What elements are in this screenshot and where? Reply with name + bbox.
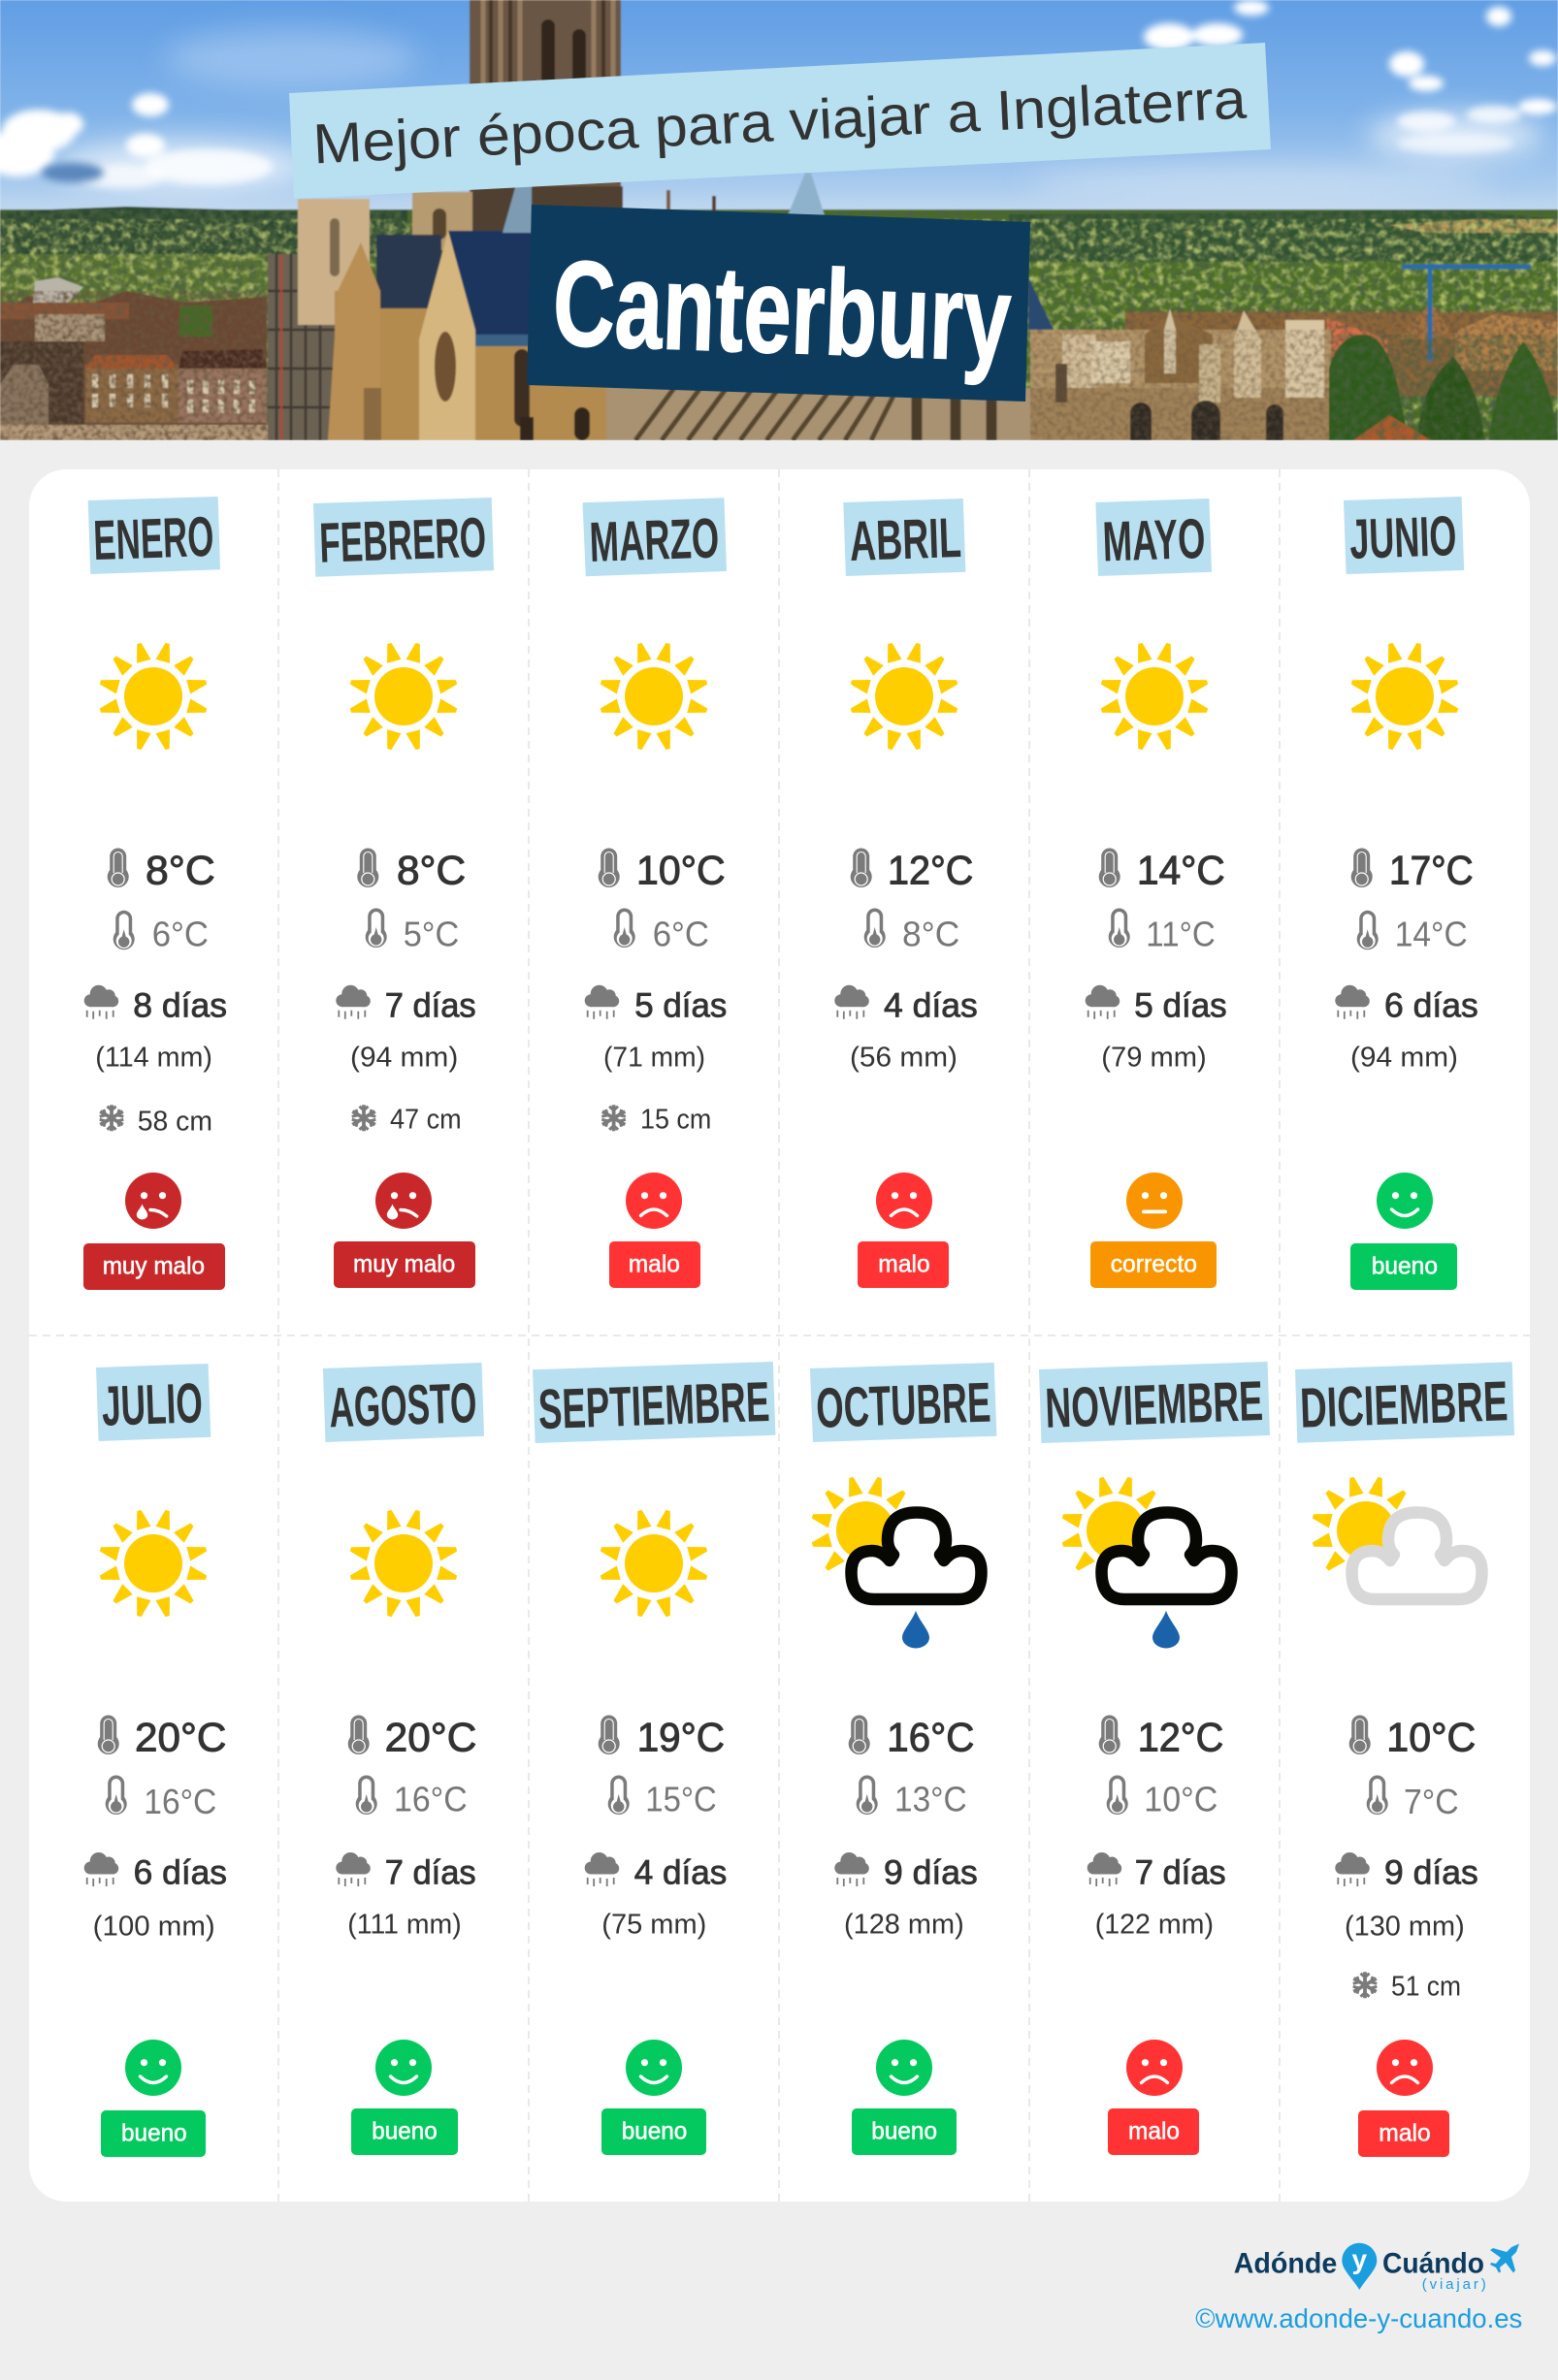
rating badge: bueno xyxy=(871,2117,937,2144)
rating face xyxy=(125,2040,181,2096)
month label xyxy=(88,497,220,574)
month label: JULIO xyxy=(101,1371,204,1438)
rating badge xyxy=(351,2108,458,2155)
month label xyxy=(323,1363,484,1442)
rating badge xyxy=(1108,2108,1199,2155)
title text: Mejor época para viajar a Inglaterra xyxy=(311,68,1249,177)
panel: marzo xyxy=(582,498,727,1288)
snowfall xyxy=(100,1105,212,1138)
right cathedral xyxy=(1029,328,1332,389)
low temperature xyxy=(356,1775,468,1818)
month label: SEPTIEMBRE xyxy=(537,1370,770,1441)
month label xyxy=(843,499,965,576)
rainy days: 9 días xyxy=(884,1853,978,1891)
month label: NOVIEMBRE xyxy=(1044,1369,1264,1440)
rainy days: 5 días xyxy=(1134,986,1227,1024)
low temperature: 6°C xyxy=(653,915,709,954)
month label: OCTUBRE xyxy=(815,1371,991,1440)
panel: julio xyxy=(84,1364,227,2157)
rating badge xyxy=(609,1241,700,1288)
rainy days: 7 días xyxy=(385,1853,476,1891)
right town roofs xyxy=(1125,312,1558,396)
high temperature: 20°C xyxy=(385,1715,476,1760)
icon: sun behind grey cloud xyxy=(1311,1475,1482,1599)
rainy days: 4 días xyxy=(884,986,978,1024)
low temperature: 10°C xyxy=(1144,1779,1217,1818)
low temperature: 11°C xyxy=(1146,915,1216,954)
rating badge xyxy=(83,1243,225,1290)
city name banner xyxy=(527,205,1030,402)
panel: enero xyxy=(83,497,227,1290)
high temperature: 12°C xyxy=(1138,1715,1223,1760)
rating face xyxy=(626,1173,682,1229)
rainfall: (79 mm) xyxy=(1101,1042,1207,1073)
rating face xyxy=(1377,1173,1433,1229)
month label xyxy=(533,1362,775,1443)
low temperature xyxy=(857,1775,967,1818)
left town xyxy=(0,291,267,440)
panel: diciembre xyxy=(1295,1362,1514,2157)
rating badge: malo xyxy=(1379,2119,1431,2146)
month label: ABRIL xyxy=(849,506,962,573)
rainfall: (75 mm) xyxy=(601,1909,706,1940)
high temperature xyxy=(849,1715,974,1760)
snowfall: 47 cm xyxy=(390,1104,462,1135)
high temperature: 20°C xyxy=(135,1715,226,1760)
right trees xyxy=(1329,335,1409,440)
rainy days: 7 días xyxy=(385,986,476,1024)
rainy days xyxy=(834,985,978,1024)
month label: MARZO xyxy=(589,506,720,574)
panel: febrero xyxy=(313,498,494,1288)
rainy days xyxy=(585,1852,727,1891)
rainy days: 4 días xyxy=(634,1853,727,1891)
high temperature xyxy=(1099,848,1225,893)
rainfall: (71 mm) xyxy=(603,1042,705,1073)
icon: sun behind cloud with rain drop xyxy=(1060,1475,1232,1649)
icon: sun xyxy=(599,641,709,752)
high temperature: 14°C xyxy=(1137,848,1225,893)
rating face xyxy=(1377,2040,1433,2096)
snowfall xyxy=(1353,1972,1461,2003)
high temperature: 8°C xyxy=(146,848,215,893)
icon: sun xyxy=(98,1508,209,1619)
high temperature: 10°C xyxy=(1386,1715,1476,1760)
rainfall: (94 mm) xyxy=(350,1042,458,1073)
rainy days xyxy=(1335,985,1478,1024)
month label xyxy=(1344,497,1464,574)
rainy days xyxy=(336,1852,476,1891)
high temperature xyxy=(599,848,726,893)
low temperature: 6°C xyxy=(152,915,209,954)
snowfall: 58 cm xyxy=(138,1107,212,1138)
low temperature xyxy=(1107,1775,1217,1818)
month label xyxy=(313,498,494,577)
high temperature xyxy=(1349,1715,1476,1760)
icon: plane xyxy=(1490,2244,1519,2273)
high temperature xyxy=(1351,848,1474,893)
month label xyxy=(96,1364,211,1441)
rating badge: muy malo xyxy=(353,1250,455,1277)
high temperature: 12°C xyxy=(888,848,973,893)
cathedral central tower xyxy=(469,0,622,194)
rating badge: bueno xyxy=(622,2117,687,2144)
rainy days xyxy=(336,985,476,1024)
snowfall: 51 cm xyxy=(1391,1972,1461,2003)
rainfall: (114 mm) xyxy=(95,1042,212,1073)
rating face xyxy=(1126,1173,1183,1229)
rating badge: correcto xyxy=(1111,1250,1197,1277)
low temperature xyxy=(114,911,209,954)
city name: Canterbury xyxy=(551,236,1013,387)
rating face xyxy=(876,2040,932,2096)
rainfall: (130 mm) xyxy=(1345,1911,1465,1942)
rainfall: (100 mm) xyxy=(93,1911,215,1942)
rainy days: 6 días xyxy=(1384,986,1478,1024)
high temperature: 19°C xyxy=(637,1715,725,1760)
rating face xyxy=(375,1173,432,1229)
low temperature xyxy=(608,1775,717,1818)
snowfall: 15 cm xyxy=(640,1104,711,1135)
rainfall: (94 mm) xyxy=(1350,1042,1458,1073)
rainy days xyxy=(1087,1852,1226,1891)
rating badge: bueno xyxy=(372,2117,438,2144)
month label xyxy=(1039,1362,1270,1443)
icon: location pin with y: y xyxy=(1352,2244,1368,2274)
low temperature: 13°C xyxy=(894,1779,967,1818)
high temperature xyxy=(357,848,466,893)
rainy days: 5 días xyxy=(634,986,727,1024)
low temperature: 5°C xyxy=(404,915,459,954)
low temperature xyxy=(1367,1775,1459,1821)
low temperature xyxy=(864,908,959,954)
low temperature xyxy=(1109,908,1216,954)
rainfall: (122 mm) xyxy=(1095,1909,1214,1940)
rainy days xyxy=(84,985,227,1024)
icon: location pin with y xyxy=(1342,2243,1377,2290)
panel: junio xyxy=(1335,497,1478,1290)
towers xyxy=(268,254,338,440)
website credit: ©www.adonde-y-cuando.es xyxy=(1195,2303,1522,2333)
rainy days: 7 días xyxy=(1135,1853,1226,1891)
month label: AGOSTO xyxy=(328,1371,477,1439)
icon: sun xyxy=(1349,641,1460,752)
rating badge: malo xyxy=(629,1250,680,1277)
low temperature xyxy=(106,1775,216,1821)
month label xyxy=(582,498,727,576)
month label: MAYO xyxy=(1102,507,1206,574)
panel: abril xyxy=(834,499,978,1288)
rainy days: 6 días xyxy=(134,1853,227,1891)
icon: sun xyxy=(1099,641,1210,752)
header photo: Canterbury skyline xyxy=(0,0,1558,440)
icon: sun xyxy=(599,1508,709,1619)
rainy days: 9 días xyxy=(1384,1853,1478,1891)
rating badge xyxy=(1090,1241,1217,1288)
rating face xyxy=(125,1173,181,1229)
snowfall xyxy=(352,1104,462,1135)
rating badge: bueno xyxy=(121,2119,187,2146)
low temperature: 15°C xyxy=(645,1779,717,1818)
snowfall xyxy=(601,1104,711,1135)
rating badge: malo xyxy=(878,1250,930,1277)
high temperature xyxy=(1099,1715,1223,1760)
crane xyxy=(1402,264,1531,361)
rating badge xyxy=(858,1241,949,1288)
month label xyxy=(810,1363,996,1442)
title banner xyxy=(289,43,1271,199)
nave roof xyxy=(606,388,1033,440)
rating face xyxy=(626,2040,682,2096)
low temperature: 14°C xyxy=(1395,915,1468,954)
panel: septiembre xyxy=(533,1362,775,2155)
rating badge: malo xyxy=(1128,2117,1180,2144)
rainy days xyxy=(84,1852,227,1891)
rainfall: (56 mm) xyxy=(850,1042,958,1073)
footer logo xyxy=(1234,2243,1519,2293)
high temperature: 16°C xyxy=(887,1715,974,1760)
icon: sun behind cloud with rain drop xyxy=(810,1475,982,1649)
panel: mayo xyxy=(1086,499,1227,1288)
rainfall: (111 mm) xyxy=(347,1909,462,1940)
high temperature: 8°C xyxy=(397,848,466,893)
rainfall: (128 mm) xyxy=(844,1909,964,1940)
month label: FEBRERO xyxy=(318,506,487,575)
icon: sun xyxy=(849,641,959,752)
high temperature xyxy=(851,848,973,893)
high temperature: 17°C xyxy=(1389,848,1474,893)
logo word: Adónde: Adónde xyxy=(1234,2247,1337,2279)
month label: JUNIO xyxy=(1348,504,1457,571)
rating badge: bueno xyxy=(1372,1252,1438,1279)
logo word: Cuándo: Cuándo xyxy=(1382,2247,1484,2279)
low temperature: 16°C xyxy=(144,1782,216,1821)
rainy days xyxy=(1335,1852,1478,1891)
rainy days xyxy=(585,985,727,1024)
month label: ENERO xyxy=(92,505,214,572)
rainy days xyxy=(834,1852,978,1891)
panel: monthly calendar card xyxy=(29,469,1530,2202)
icon: sun xyxy=(98,641,209,752)
low temperature: 7°C xyxy=(1404,1782,1459,1821)
panel: noviembre xyxy=(1039,1362,1270,2155)
rating face xyxy=(1126,2040,1183,2096)
month label xyxy=(1095,499,1212,576)
icon: sun xyxy=(348,1508,459,1619)
rating face xyxy=(876,1173,932,1229)
rating badge xyxy=(1358,2110,1449,2157)
rating badge xyxy=(852,2108,957,2155)
foliage ground xyxy=(0,209,1558,440)
rainy days xyxy=(1086,985,1227,1024)
low temperature xyxy=(366,908,459,954)
rating badge xyxy=(334,1241,475,1288)
high temperature xyxy=(599,1715,725,1760)
rating face xyxy=(375,2040,432,2096)
icon: sun xyxy=(348,641,459,752)
rating badge: muy malo xyxy=(103,1252,205,1279)
rating badge xyxy=(101,2110,206,2157)
rating badge xyxy=(1350,1243,1457,1290)
low temperature xyxy=(614,908,709,954)
rainy days: 8 días xyxy=(133,986,227,1024)
panel: octubre xyxy=(810,1363,996,2155)
low temperature xyxy=(1357,911,1468,954)
panel: agosto xyxy=(323,1363,484,2155)
low temperature: 8°C xyxy=(902,915,959,954)
high temperature: 10°C xyxy=(636,848,726,893)
high temperature xyxy=(108,848,215,893)
logo tagline: (viajar) xyxy=(1422,2276,1486,2293)
rating badge xyxy=(601,2108,706,2155)
low temperature: 16°C xyxy=(394,1779,468,1818)
